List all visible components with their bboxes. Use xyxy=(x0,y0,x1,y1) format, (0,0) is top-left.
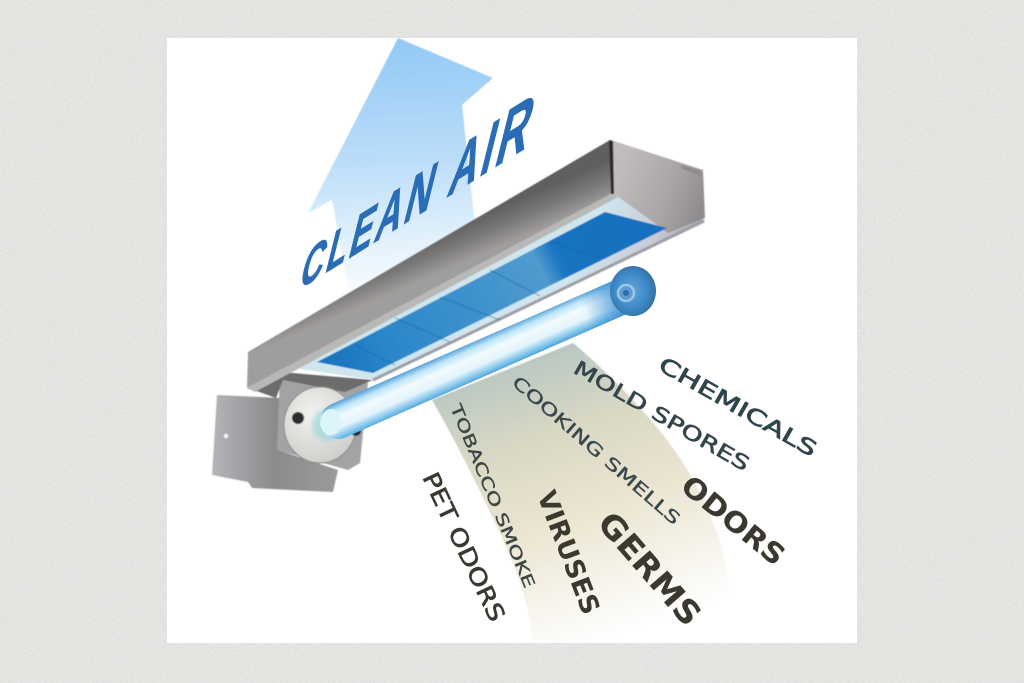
bright left end xyxy=(321,409,341,435)
white card panel xyxy=(167,38,857,643)
label: COOKING SMELLS: COOKING SMELLS xyxy=(508,373,684,529)
lamp glow xyxy=(312,409,342,441)
glass tube xyxy=(338,295,625,421)
panel section lines xyxy=(355,241,600,365)
label: TOBACCO SMOKE: TOBACCO SMOKE xyxy=(446,400,539,591)
label: PET ODORS: PET ODORS xyxy=(417,468,509,626)
contaminant labels xyxy=(417,352,821,633)
heading: CLEAN AIR: CLEAN AIR xyxy=(294,72,546,308)
box rim xyxy=(248,372,373,398)
corner seam xyxy=(609,140,614,194)
underside gray edge xyxy=(373,221,704,380)
lamp end cap xyxy=(610,266,656,316)
label: CHEMICALS: CHEMICALS xyxy=(655,352,821,462)
label: ODORS: ODORS xyxy=(675,469,792,572)
lower lip xyxy=(247,193,618,392)
cap bore xyxy=(623,290,629,296)
lamp foot xyxy=(351,426,361,436)
housing: stainless steel hood xyxy=(247,140,705,392)
arrow: clean air upward xyxy=(308,38,493,300)
top face xyxy=(247,140,613,388)
cap center fitting xyxy=(618,285,634,301)
plate hole xyxy=(224,434,228,438)
light beam: contaminants path xyxy=(432,343,730,640)
label: MOLD SPORES: MOLD SPORES xyxy=(570,356,754,476)
white disk xyxy=(284,387,356,463)
bracket: wall mount xyxy=(212,372,373,492)
blue filter panel xyxy=(317,212,667,373)
lamp right end tint xyxy=(585,295,625,313)
end tabs xyxy=(680,165,702,176)
label: VIRUSES: VIRUSES xyxy=(530,487,605,619)
label: GERMS: GERMS xyxy=(590,504,709,633)
underside xyxy=(294,193,705,380)
UV lamp tube xyxy=(312,266,656,441)
back plate xyxy=(212,395,338,492)
mount box xyxy=(277,375,368,470)
knob xyxy=(292,412,304,424)
end face xyxy=(611,140,705,233)
